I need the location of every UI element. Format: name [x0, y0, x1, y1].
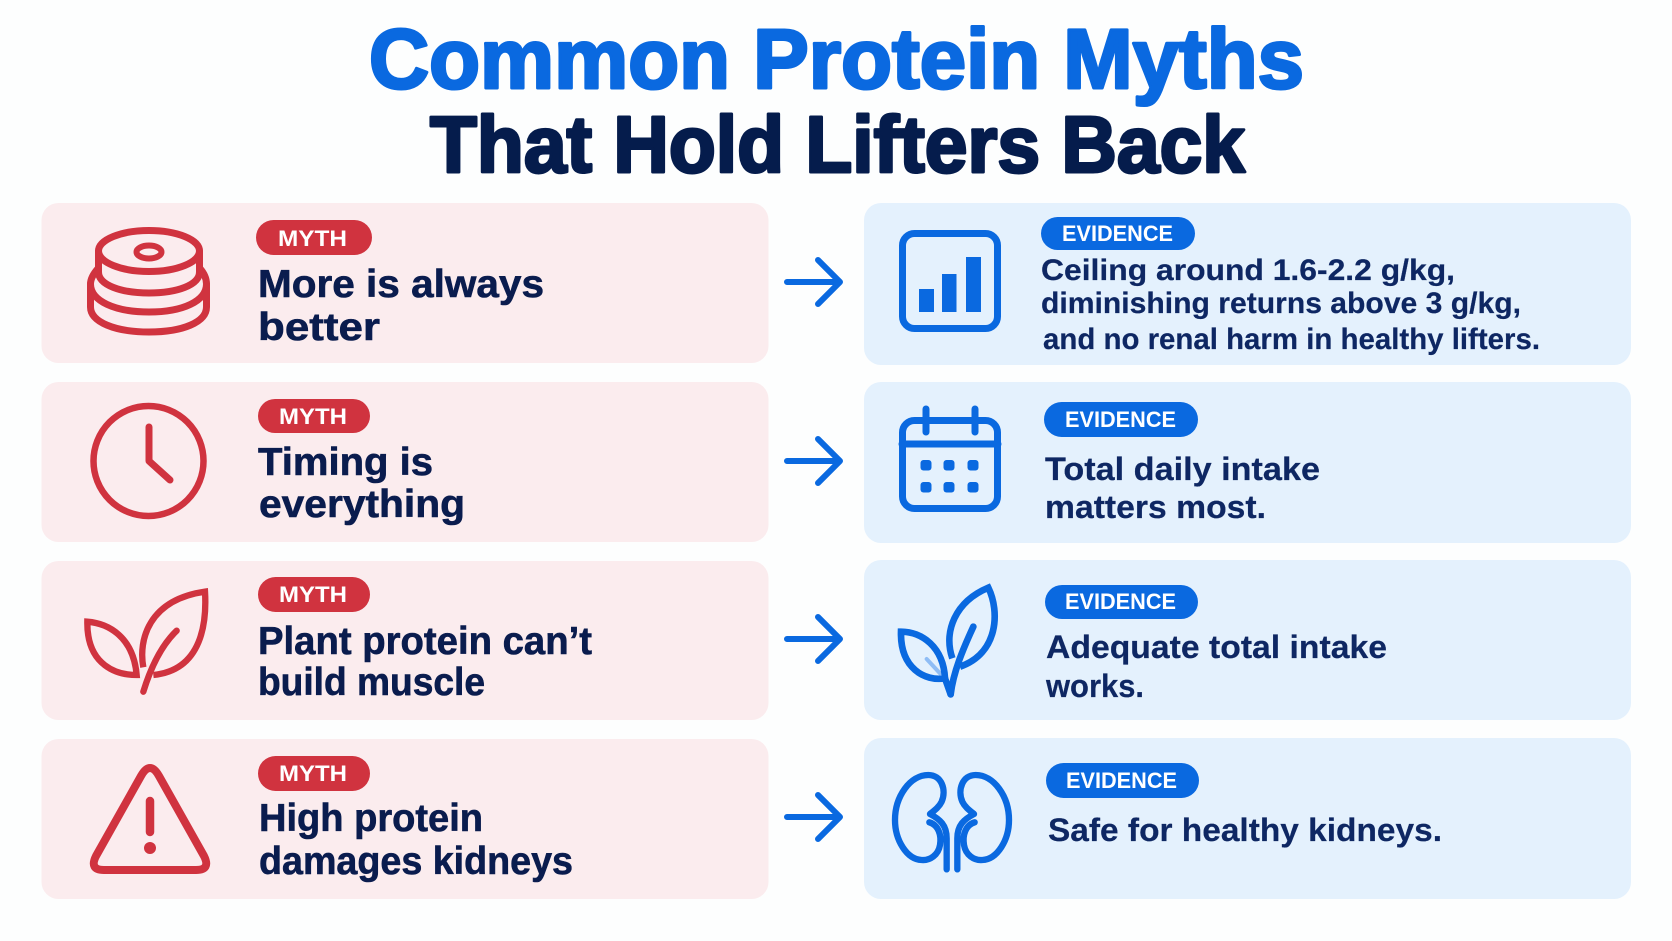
- panel: evidence 3: [864, 560, 1631, 720]
- badge: myth: MYTH: [279, 582, 347, 607]
- icon: plant leaves: [87, 592, 205, 692]
- evidence text: [1045, 451, 1320, 525]
- myth text: Timing is: [258, 441, 433, 484]
- badge: evidence: [1041, 217, 1195, 250]
- myth text: High protein: [259, 797, 483, 840]
- badge: myth: [258, 577, 370, 612]
- myth text: [258, 620, 592, 704]
- badge: evidence: [1046, 763, 1199, 798]
- myth text: [258, 441, 465, 526]
- panel: myth 4: [42, 739, 768, 899]
- panel: evidence 2: [864, 382, 1631, 543]
- myth text: [258, 263, 544, 349]
- badge: myth: MYTH: [279, 761, 347, 786]
- evidence text: Total daily intake: [1045, 451, 1320, 487]
- badge: evidence: EVIDENCE: [1062, 221, 1173, 246]
- evidence text: Safe for healthy kidneys.: [1048, 812, 1442, 848]
- badge: evidence: EVIDENCE: [1065, 407, 1176, 432]
- icon: kidneys: [895, 775, 1009, 869]
- badge: myth: [256, 220, 372, 255]
- badge: evidence: EVIDENCE: [1065, 589, 1176, 614]
- arrow 1: [787, 260, 840, 304]
- arrow 2: [787, 439, 840, 483]
- evidence text: works.: [1045, 668, 1144, 704]
- evidence text: diminishing returns above 3 g/kg,: [1041, 287, 1521, 320]
- evidence text: and no renal harm in healthy lifters.: [1043, 323, 1540, 356]
- icon: bar chart: [902, 234, 998, 328]
- evidence text: Ceiling around 1.6-2.2 g/kg,: [1041, 254, 1455, 287]
- evidence text: [1041, 254, 1540, 356]
- title: [369, 12, 1304, 189]
- badge: evidence: [1045, 585, 1198, 619]
- badge: myth: MYTH: [279, 404, 347, 429]
- title: Common Protein Myths: [369, 12, 1304, 106]
- evidence text: [1045, 629, 1387, 704]
- panel: evidence 1: [864, 203, 1631, 365]
- myth text: build muscle: [258, 661, 485, 704]
- myth text: better: [258, 306, 380, 349]
- panel: myth 2: [42, 382, 768, 542]
- badge: myth: [258, 756, 370, 791]
- arrow 3: [787, 617, 840, 661]
- panel: evidence 4: [864, 738, 1631, 899]
- myth text: damages kidneys: [259, 840, 573, 883]
- title: That Hold Lifters Back: [430, 100, 1245, 189]
- icon: calendar: [902, 409, 998, 508]
- badge: evidence: EVIDENCE: [1066, 768, 1177, 793]
- panel: myth 1: [42, 203, 768, 363]
- evidence text: Adequate total intake: [1046, 629, 1387, 665]
- icon: plant leaves: [901, 588, 995, 694]
- icon: clock: [94, 406, 204, 516]
- myth text: Plant protein can’t: [258, 620, 592, 663]
- icon: weight plates: [90, 230, 206, 332]
- myth text: everything: [259, 483, 465, 526]
- badge: evidence: [1044, 402, 1198, 437]
- badge: myth: [258, 399, 370, 433]
- evidence text: matters most.: [1045, 489, 1266, 525]
- panel: myth 3: [42, 561, 768, 720]
- badge: myth: MYTH: [278, 226, 347, 251]
- arrow 4: [787, 795, 840, 839]
- myth text: [259, 797, 573, 883]
- icon: warning triangle: [94, 768, 206, 870]
- myth text: More is always: [258, 263, 544, 306]
